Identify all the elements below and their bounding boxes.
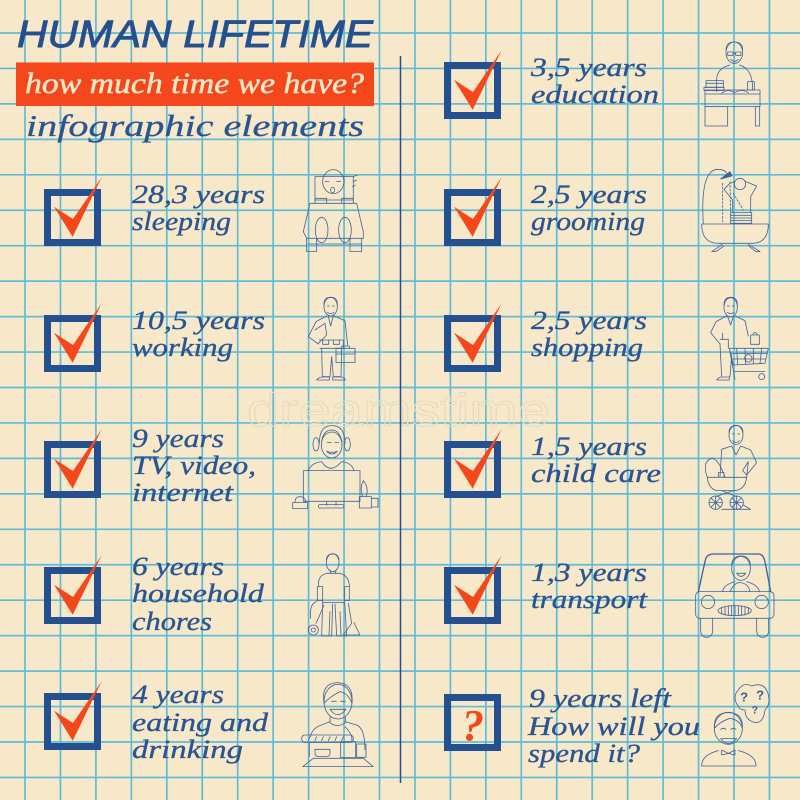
question box: ? [462, 701, 484, 750]
icon: sleeping person [303, 170, 363, 252]
text: household chores: chores [132, 607, 212, 636]
watermark: dreamstime [247, 384, 550, 436]
row: years left question [448, 684, 769, 768]
checkbox [48, 429, 102, 494]
text: shopping: shopping [531, 333, 643, 362]
text: working: 10,5 years [132, 306, 265, 335]
text: working: working [132, 333, 233, 362]
icon: thinking man with question marks: ? [756, 687, 764, 702]
checkbox [448, 303, 502, 368]
row: sleeping [48, 170, 363, 252]
text: education: 3,5 years [530, 53, 647, 82]
icon: man with baby pram [705, 425, 757, 509]
text: child care: 1,5 years [531, 432, 647, 461]
checkbox [48, 681, 102, 746]
checkbox [448, 50, 502, 115]
icon: man with shopping cart [711, 297, 768, 380]
icon: man reading at desk [704, 42, 760, 126]
row: grooming [448, 169, 768, 252]
text: tv video internet: internet [132, 478, 234, 507]
text: household chores [132, 552, 265, 636]
icon: man with briefcase [308, 297, 355, 380]
text: sleeping: sleeping [132, 207, 231, 236]
text: nine years left [527, 684, 700, 768]
text: sleeping [132, 180, 265, 236]
text: working [132, 306, 265, 362]
center divider [400, 56, 402, 783]
banner: how much time we have: how much time we have? [25, 67, 364, 100]
text: eating and drinking: drinking [132, 735, 243, 764]
text: education [530, 53, 659, 109]
text: nine years left: How will you [527, 712, 700, 741]
text: transport: 1,3 years [531, 558, 647, 587]
title: HUMAN LIFETIME [17, 14, 374, 56]
text: nine years left: spend it? [528, 739, 640, 768]
icon: man with vacuum and broom [308, 554, 360, 636]
text: grooming [531, 180, 647, 236]
row: eating and drinking [48, 680, 373, 767]
checkbox [48, 555, 102, 620]
text: child care [531, 432, 661, 488]
text: child care: child care [531, 459, 661, 488]
icon: thinking man with question marks: ? [740, 690, 748, 705]
subtitle: infographic elements [26, 108, 364, 143]
text: household chores: household [132, 579, 265, 608]
text: sleeping: 28,3 years [132, 180, 265, 209]
row: child care [448, 425, 757, 509]
text: eating and drinking [132, 680, 269, 764]
text: tv video internet: TV, video, [132, 451, 256, 480]
icon: man with headphones at computer [293, 426, 378, 509]
text: grooming: grooming [531, 207, 645, 236]
icon: thinking man with question marks [702, 685, 769, 766]
row: education [448, 42, 760, 126]
text: nine years left: 9 years left [529, 684, 672, 713]
checkbox [448, 429, 502, 494]
text: shopping [531, 306, 647, 362]
checkbox [448, 555, 502, 620]
icon: person showering in bathtub [702, 169, 768, 252]
text: tv video internet [132, 424, 256, 507]
row: transport [448, 554, 774, 637]
text: transport [531, 558, 648, 614]
text: household chores: 6 years [132, 552, 224, 581]
text: grooming: 2,5 years [531, 180, 647, 209]
text: shopping: 2,5 years [531, 306, 647, 335]
row: household chores [48, 552, 360, 636]
text: transport: transport [531, 585, 648, 614]
checkbox [48, 177, 102, 242]
icon: man eating at table [302, 683, 373, 767]
question box [448, 698, 498, 750]
banner: how much time we have [16, 62, 374, 106]
checkbox [448, 177, 502, 242]
row: tv video internet [48, 424, 378, 509]
text: eating and drinking: eating and [132, 708, 269, 737]
row: working [48, 297, 355, 380]
row: shopping [448, 297, 768, 380]
text: education: education [531, 80, 659, 109]
icon: thinking man with question marks: ? [752, 704, 758, 716]
icon: man driving car [696, 554, 774, 637]
text: eating and drinking: 4 years [132, 680, 224, 709]
checkbox [48, 303, 102, 368]
text: tv video internet: 9 years [132, 424, 224, 453]
